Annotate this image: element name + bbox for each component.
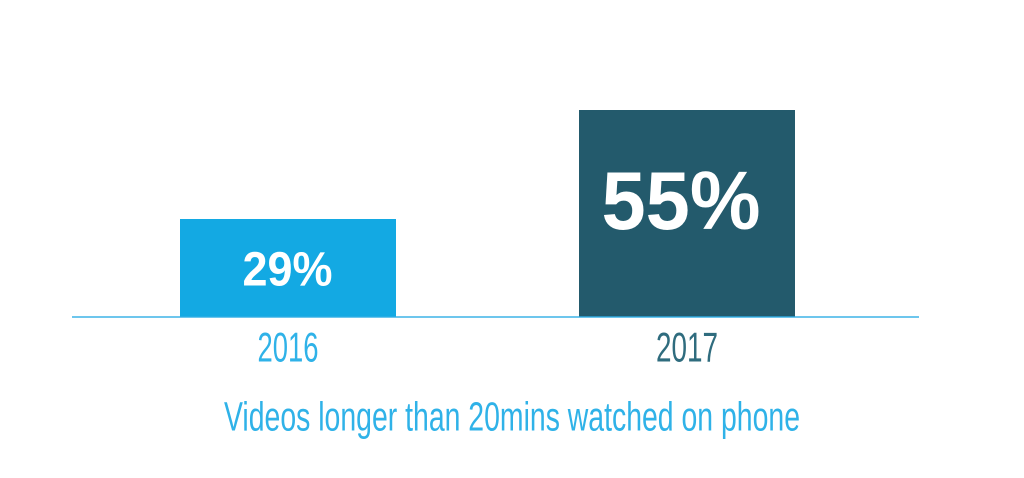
axis label: 2016: 2016	[258, 324, 318, 370]
axis label: 2017: 2017	[656, 324, 718, 370]
bar: 2017	[579, 110, 795, 317]
bar: 2016	[180, 219, 396, 317]
value: 29%: 29%	[242, 244, 332, 296]
value: 55%: 55%	[602, 154, 760, 247]
